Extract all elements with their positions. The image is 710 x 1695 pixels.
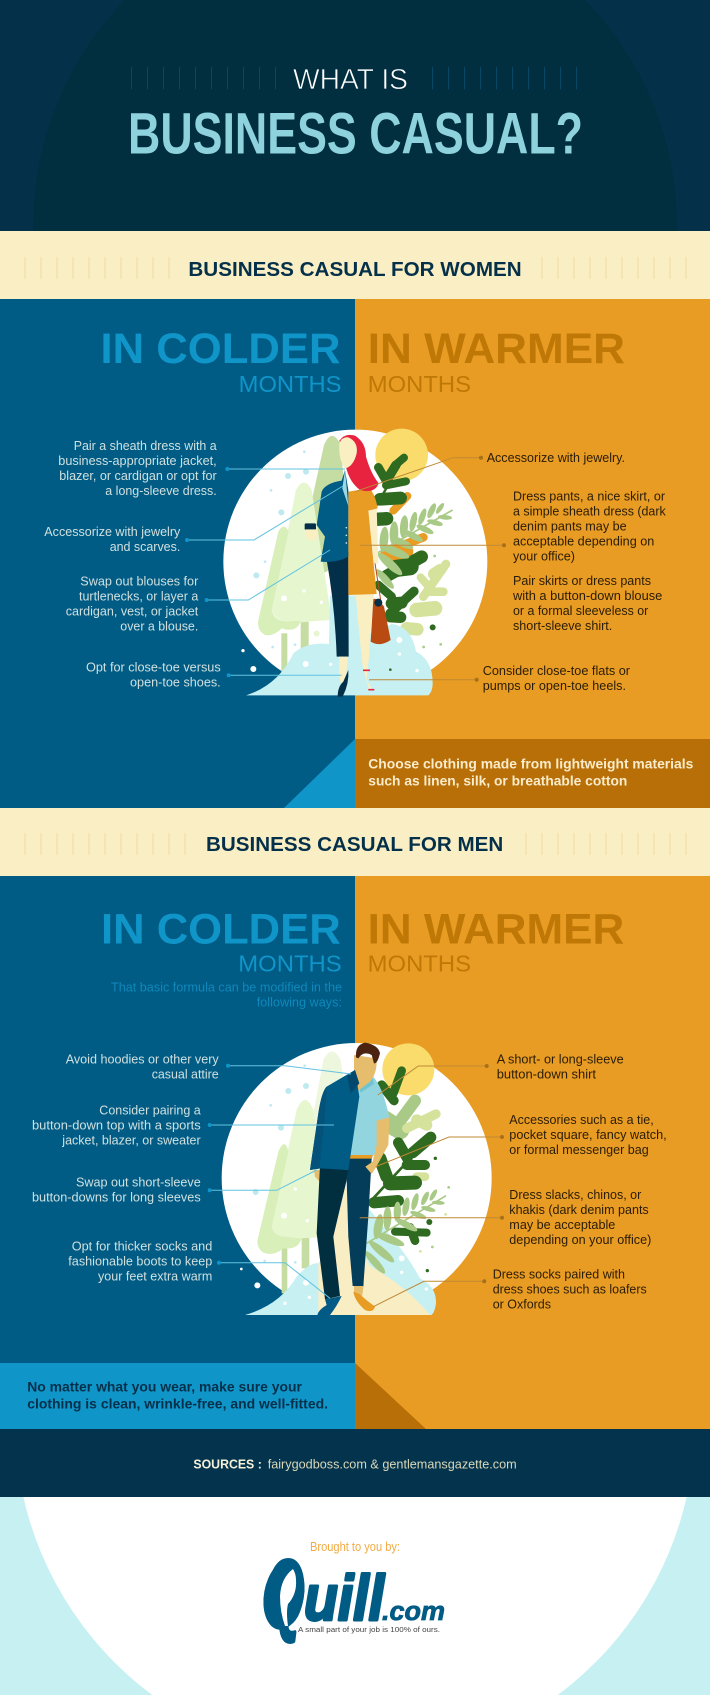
note bar: lightweight materials [355,739,710,808]
text: women colder tips: and scarves. [110,539,180,554]
note bar: clean and well-fitted: No matter what you wear, make sure your [27,1379,303,1395]
panel: men warmer [355,876,710,1429]
note bar: clean and well-fitted: clothing is clean, wrinkle-free, and well-fitted. [27,1395,328,1411]
text: women warmer tips: Pair skirts or dress pants [513,573,651,588]
panel: men colder [0,876,355,1429]
panel: women warmer [355,299,710,808]
text: women warmer tips: pumps or open-toe heels. [483,678,626,693]
plant: top dark leaf [382,1071,402,1101]
text: men colder tips: casual attire [152,1066,219,1081]
text: men warmer tips [493,1051,667,1311]
text: men colder tips: button-downs for long sleeves [32,1189,201,1204]
text: men warmer tips: or Oxfords [493,1296,551,1311]
text: women warmer tips: acceptable depending on [513,534,654,549]
text: women colder tips: Pair a sheath dress with a [74,438,217,453]
logo: quill.com: .com [382,1596,445,1626]
text: women warmer tips: Consider close-toe flats or [483,663,631,678]
plant: large dark leaf [372,1137,431,1241]
logo: quill.com: uill [304,1562,385,1634]
corner triangle: men warmer [355,1363,426,1429]
illustration: man with plants [222,1043,492,1315]
text: women warmer tips: your office) [513,549,575,564]
plant: dark leaves [377,456,422,597]
text: men warmer tips: or formal messenger bag [509,1142,649,1157]
text: men colder tips: Avoid hoodies or other very [66,1051,219,1066]
text: women warmer tips [483,450,666,693]
figure: man [310,1043,389,1315]
text: women colder tips: over a blouse. [120,618,198,633]
text: men warmer tips: dress shoes such as loafers [493,1281,647,1296]
title: business casual: BUSINESS CASUAL? [128,102,583,166]
plant: fern [362,1188,446,1276]
plant: orange lobes [387,496,423,555]
text: men warmer tips: Accessories such as a tie, [509,1112,654,1127]
callouts: men warmer [360,1064,504,1307]
plant: lower dark leaf [390,591,414,617]
text: women warmer tips: or a formal sleeveless or [513,603,649,618]
heading: in colder months: MONTHS [239,371,342,397]
text: women warmer tips: short-sleeve shirt. [513,618,612,633]
text: men colder tips [32,1051,219,1284]
header panel [0,0,710,231]
text: women colder tips [44,438,221,690]
panel: women colder [0,299,355,808]
text: men colder tips: Swap out short-sleeve [76,1174,201,1189]
callouts: women warmer [355,456,506,682]
text: men warmer tips: depending on your office) [509,1232,651,1247]
heading band: men: BUSINESS CASUAL FOR MEN [206,834,503,856]
heading: in warmer months [368,905,624,977]
logo: quill.com [258,1542,445,1644]
note bar: lightweight materials: Choose clothing made from lightweight materials [368,756,694,772]
text: women warmer tips: Accessorize with jewelry. [487,450,625,465]
note bar: clean and well-fitted [0,1363,355,1429]
text: women colder tips: business-appropriate jacket, [58,453,217,468]
text: women warmer tips: with a button-down blouse [512,588,662,603]
text: men colder tips: fashionable boots to keep [68,1254,212,1269]
heading: in warmer months: MONTHS [368,371,471,397]
text: men warmer tips: Dress slacks, chinos, or [509,1187,642,1202]
text: women colder tips: cardigan, vest, or jacket [66,603,199,618]
heading band: men [0,808,710,876]
text: women warmer tips: Dress pants, a nice skirt, or [513,489,666,504]
footer panel [0,1497,710,1695]
title ticks [132,67,576,89]
text: men colder tips: Opt for thicker socks and [72,1239,212,1254]
text: women colder tips: turtlenecks, or layer a [79,588,199,603]
text: women warmer tips: denim pants may be [513,519,627,534]
text: men warmer tips: A short- or long-sleeve [497,1051,624,1066]
plant: pale leaves [407,564,446,629]
heading: in warmer months: MONTHS [368,951,471,977]
text: men colder tips: your feet extra warm [98,1269,212,1284]
text: women warmer tips: a simple sheath dress (dark [513,504,666,519]
heading: in colder months: IN COLDER [100,325,340,373]
heading: in colder months [100,325,342,397]
heading: in warmer months: IN WARMER [368,905,624,953]
text: women colder tips: blazer, or cardigan or opt for [59,468,217,483]
brought to you by: Brought to you by: [310,1539,400,1554]
sources bar: fairygodboss.com & gentlemansgazette.com [268,1456,517,1471]
callouts: women colder [185,467,345,677]
logo: quill.com: Q [266,1542,304,1644]
sources bar: SOURCES : [193,1456,262,1471]
text: men colder tips: button-down top with a sports [32,1118,201,1133]
text: men warmer tips: Dress socks paired with [493,1266,625,1281]
sources bar [0,1429,710,1497]
callouts: men colder [208,1064,351,1298]
text: women colder tips: open-toe shoes. [130,675,221,690]
text: basic formula intro: That basic formula can be modified in the [111,980,342,995]
heading: in colder months: IN COLDER [101,905,341,953]
heading: in warmer months: IN WARMER [368,325,625,373]
text: men warmer tips: khakis (dark denim pants [509,1202,649,1217]
illustration: woman with plants [223,429,487,697]
figure: woman [305,435,391,697]
text: men warmer tips: button-down shirt [497,1066,596,1081]
text: basic formula intro [111,980,342,1010]
note bar: lightweight materials: such as linen, silk, or breathable cotton [368,772,627,788]
logo: quill.com: A small part of your job is 100% of ours. [298,1625,440,1634]
heading: in warmer months [368,325,625,397]
text: men colder tips: Consider pairing a [99,1103,201,1118]
text: men warmer tips: pocket square, fancy watch, [509,1127,667,1142]
plant: fern [374,502,453,591]
text: basic formula intro: following ways: [257,995,342,1010]
text: women colder tips: a long-sleeve dress. [105,483,217,498]
title: what is: WHAT IS [293,64,408,96]
plant: sage and pale lobes [385,1101,436,1177]
heading band: women: BUSINESS CASUAL FOR WOMEN [188,259,522,281]
text: women colder tips: Swap out blouses for [80,573,199,588]
text: men colder tips: jacket, blazer, or sweater [61,1133,201,1148]
heading: in colder months [101,905,342,977]
text: women colder tips: Opt for close-toe versus [86,660,221,675]
text: men warmer tips: may be acceptable [509,1217,615,1232]
text: women colder tips: Accessorize with jewelry [44,524,181,539]
heading band: women [0,231,710,299]
heading: in colder months: MONTHS [238,951,342,977]
corner triangle: women colder [284,739,355,808]
